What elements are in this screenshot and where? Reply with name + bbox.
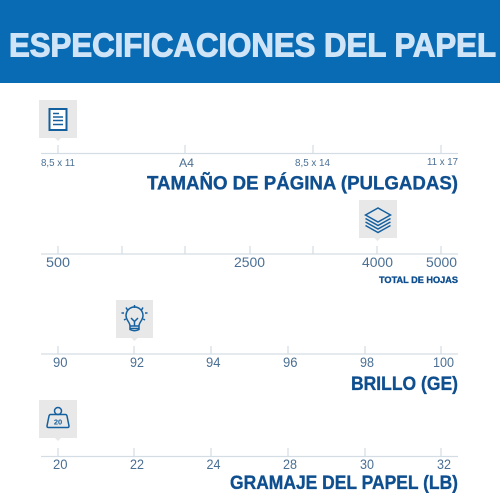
brightness labels: 94: [206, 355, 221, 370]
icon: paper stack marker: [359, 200, 397, 241]
icon: weight marker: [39, 400, 77, 441]
page size labels: A4: [179, 156, 194, 170]
sheet count labels: 5000: [426, 255, 457, 270]
icon: document marker: [39, 100, 77, 141]
brightness labels: 100: [433, 355, 454, 370]
paper weight labels: 32: [437, 457, 451, 472]
paper weight labels: 20: [53, 457, 68, 472]
page size labels: 8,5 x 14: [295, 157, 330, 169]
sheet count labels: 2500: [234, 255, 265, 270]
paper weight labels: 30: [360, 457, 374, 472]
sheet count labels: 4000: [362, 255, 393, 270]
panel: page size scale: [39, 100, 458, 194]
page size labels: 8,5 x 11: [41, 157, 75, 169]
header banner: [0, 0, 500, 83]
brightness labels: [53, 355, 454, 370]
panel: sheet count scale: [41, 200, 458, 286]
icon: light bulb marker: [116, 300, 153, 341]
paper weight labels: 24: [206, 457, 221, 472]
panel: paper weight scale: [39, 400, 458, 493]
paper weight labels: [53, 457, 451, 472]
sheet count labels: 500: [46, 255, 70, 270]
page size labels: [41, 156, 458, 170]
icon: weight marker: 20: [54, 418, 62, 426]
brightness labels: 96: [283, 355, 298, 370]
brightness labels: 90: [53, 355, 68, 370]
heading: brightness: BRILLO (GE): [351, 374, 458, 395]
paper weight labels: 28: [283, 457, 297, 472]
page size labels: 11 x 17: [427, 156, 458, 168]
panel: brightness scale: [41, 300, 458, 395]
brightness labels: 98: [360, 355, 374, 370]
heading: total sheets: TOTAL DE HOJAS: [379, 275, 458, 286]
heading: page size: TAMAÑO DE PÁGINA (PULGADAS): [147, 172, 458, 194]
brightness labels: 92: [130, 355, 144, 370]
paper weight labels: 22: [130, 457, 144, 472]
sheet count labels: [46, 255, 457, 270]
